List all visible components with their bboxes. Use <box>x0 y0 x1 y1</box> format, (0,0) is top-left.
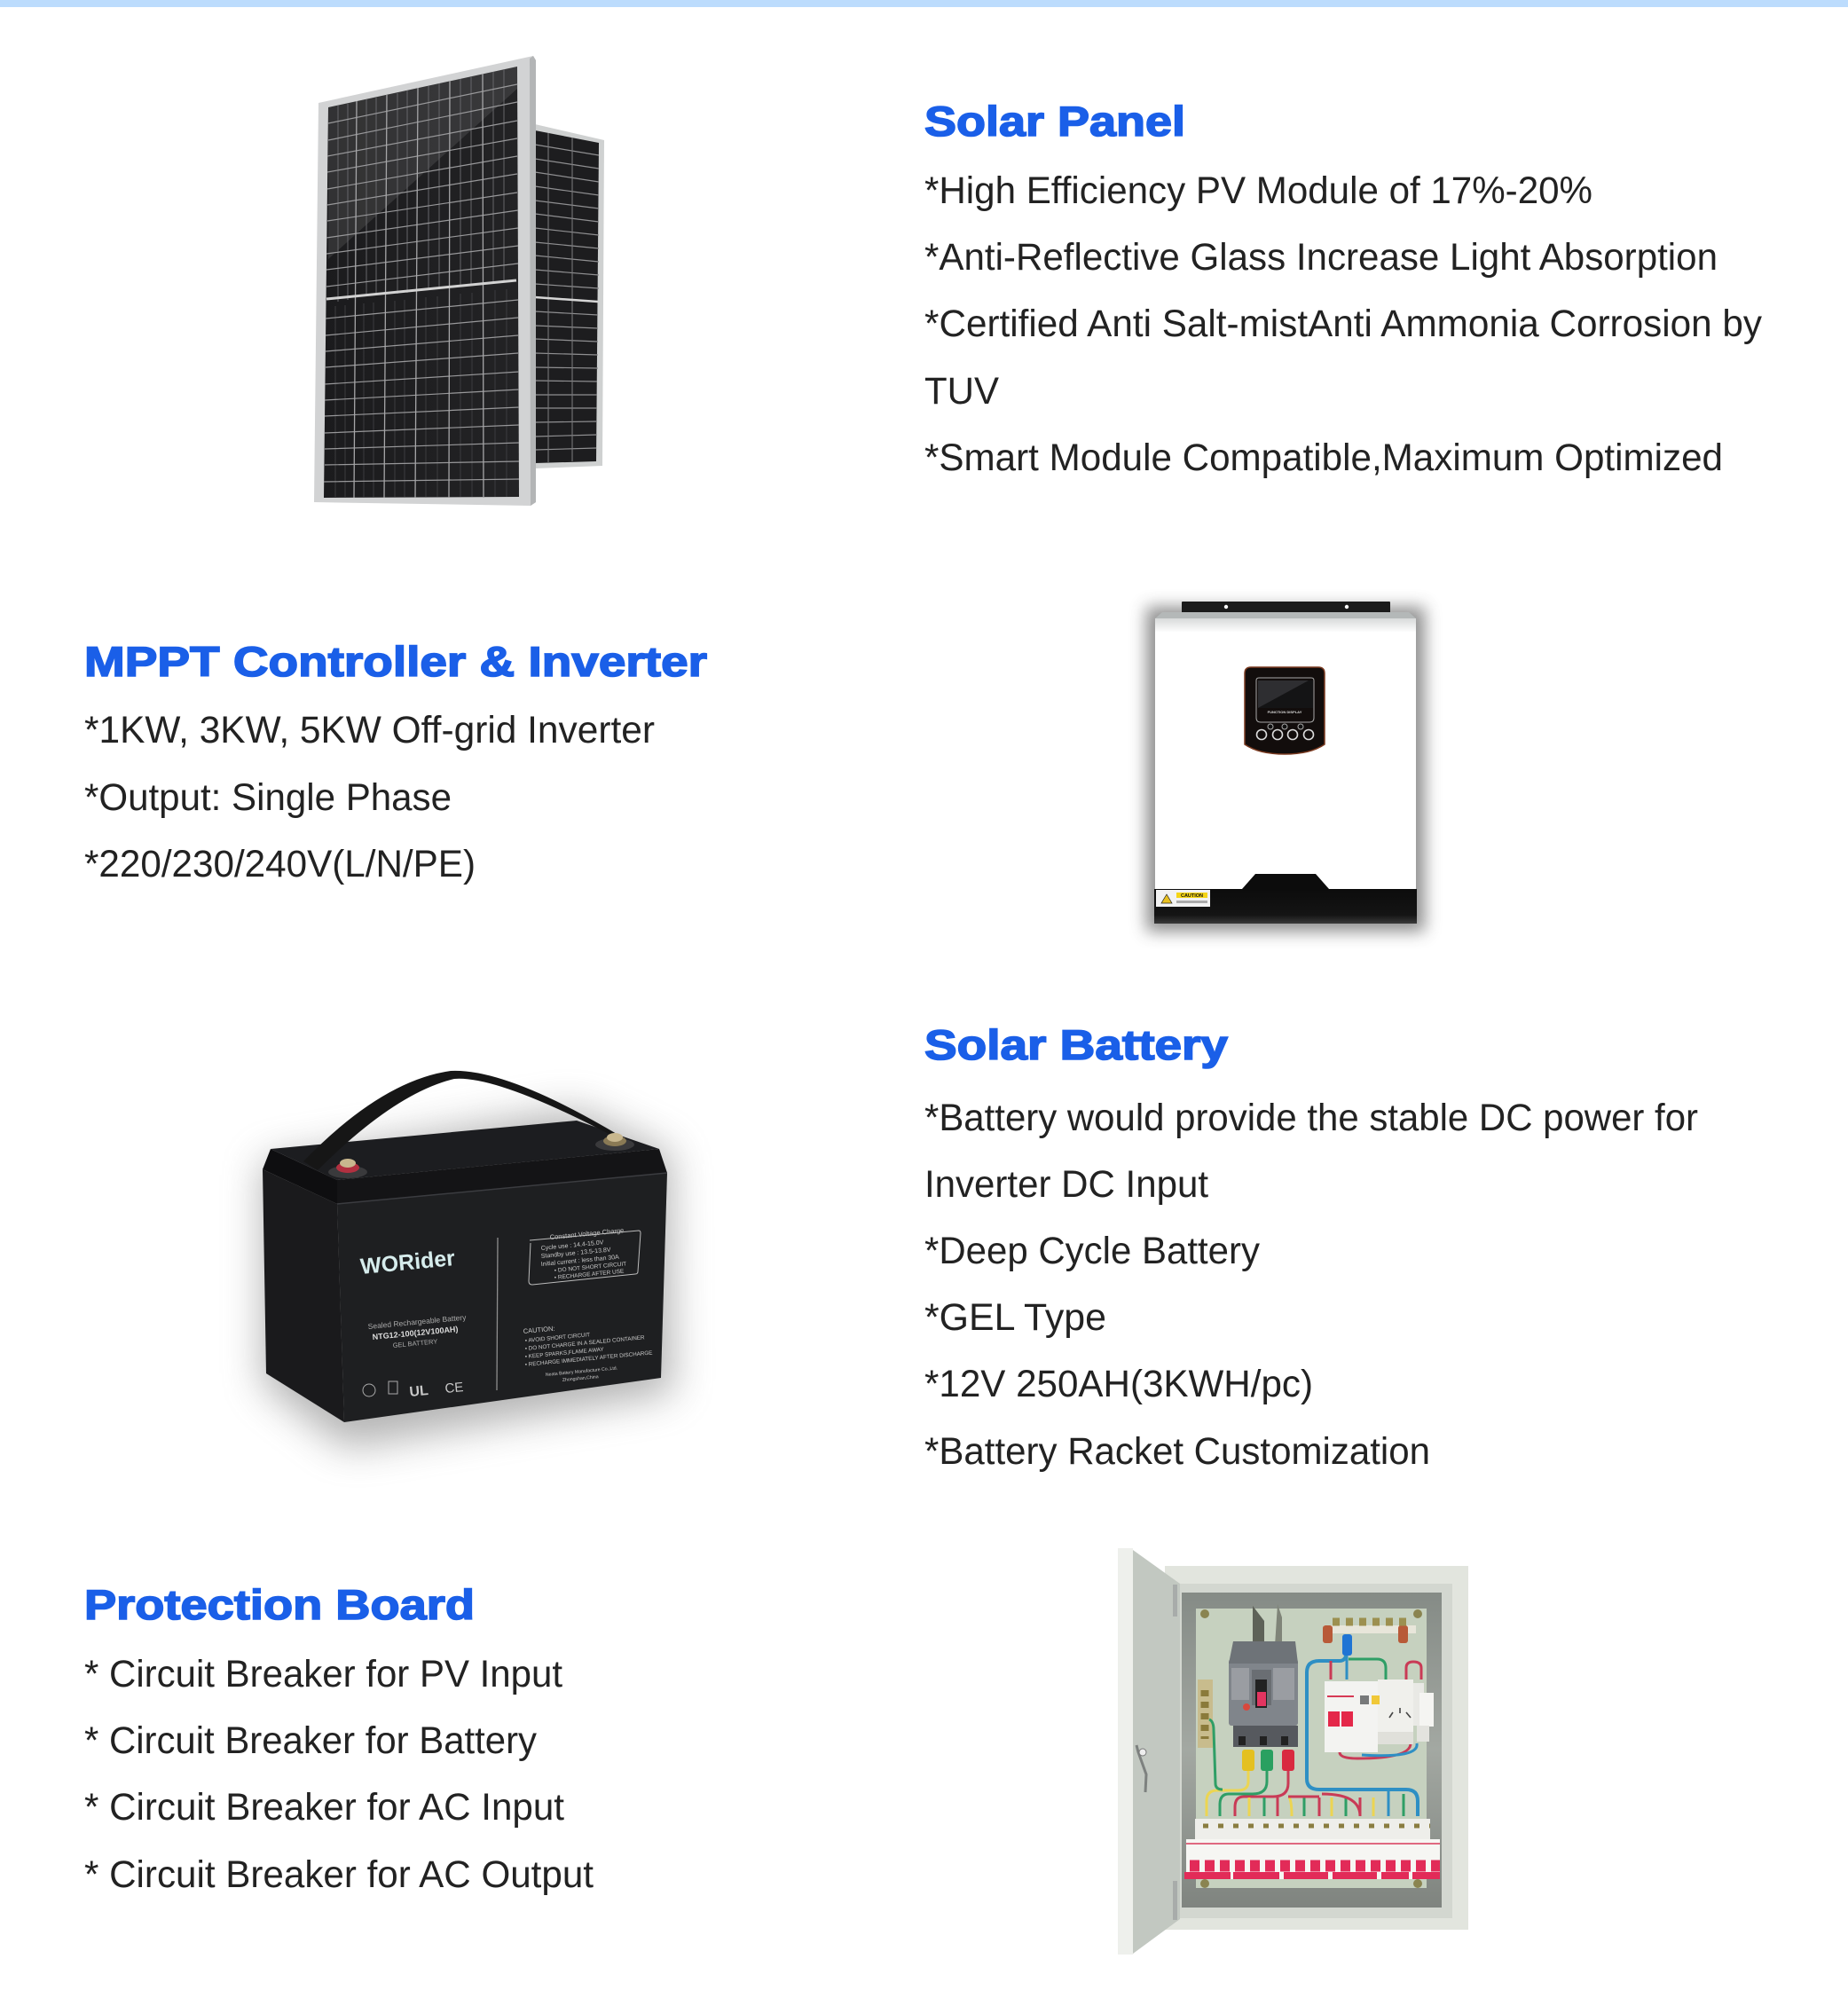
battery model text: Sealed Rechargeable Battery <box>367 1313 467 1331</box>
battery caution text <box>523 1325 653 1383</box>
feature list: *220/230/240V(L/N/PE) <box>84 843 476 885</box>
battery caution text: • AVOID SHORT CIRCUIT <box>525 1332 591 1344</box>
feature list: *Battery Racket Customization <box>924 1430 1430 1473</box>
feature list: *Deep Cycle Battery <box>924 1230 1260 1272</box>
feature list: *12V 250AH(3KWH/pc) <box>924 1363 1313 1405</box>
battery brand logo: WORider <box>359 1246 456 1279</box>
heading: MPPT Controller & Inverter: MPPT Controller & Inverter <box>84 638 707 685</box>
panel: battery image <box>263 1071 672 1448</box>
battery charge spec box: • DO NOT SHORT CIRCUIT <box>554 1261 627 1274</box>
feature list: *Certified Anti Salt-mistAnti Ammonia Corrosion by <box>924 303 1762 345</box>
feature list <box>924 169 1762 479</box>
feature list: *High Efficiency PV Module of 17%-20% <box>924 169 1592 212</box>
reflection <box>328 67 517 259</box>
battery caution text: CAUTION: <box>523 1325 555 1335</box>
feature list: *GEL Type <box>924 1296 1106 1339</box>
panel: MPPT description <box>84 638 707 885</box>
battery handle strap <box>303 1071 617 1170</box>
feature list: *Output: Single Phase <box>84 776 452 819</box>
battery caution text: • DO NOT CHARGE IN A SEALED CONTAINER <box>525 1334 645 1352</box>
top accent bar <box>0 0 1848 7</box>
main circuit breaker <box>1229 1604 1298 1747</box>
open enclosure door <box>1118 1548 1180 1955</box>
heading: Protection Board: Protection Board <box>84 1581 475 1628</box>
enclosure box <box>1165 1566 1468 1930</box>
battery caution text: Neata Battery Manufacture Co.,Ltd. <box>546 1365 617 1378</box>
battery charge spec box: Cycle use : 14.4-15.0V <box>541 1239 604 1252</box>
caution label: CAUTION <box>1181 893 1203 899</box>
battery certification marks: CE <box>444 1380 464 1396</box>
feature list: *Smart Module Compatible,Maximum Optimized <box>924 437 1723 479</box>
inverter shadow <box>1146 607 1425 932</box>
heading: Solar Battery: Solar Battery <box>924 1021 1228 1068</box>
caution label <box>1156 890 1210 907</box>
battery shadow <box>263 1109 672 1448</box>
battery charge spec box: Constant Voltage Charge <box>549 1226 625 1241</box>
inverter mounting bracket <box>1182 602 1390 614</box>
feature list <box>924 1097 1698 1473</box>
rear solar module <box>535 124 604 468</box>
battery caution text: Zhongshan,China <box>562 1374 599 1383</box>
inverter body <box>1154 618 1417 924</box>
heading: Solar Panel: Solar Panel <box>924 98 1185 145</box>
feature list: * Circuit Breaker for Battery <box>84 1719 537 1762</box>
battery certification marks <box>363 1380 464 1400</box>
feature list: * Circuit Breaker for PV Input <box>84 1653 562 1695</box>
panel: solar panel description <box>924 98 1762 479</box>
panel: inverter image <box>1146 602 1425 932</box>
panel: solar panel image <box>314 56 604 506</box>
battery caution text: • KEEP SPARKS,FLAME AWAY <box>525 1347 605 1360</box>
battery terminals <box>328 1133 634 1178</box>
inverter control panel <box>1245 667 1325 754</box>
feature list: TUV <box>924 370 999 413</box>
battery caution text: • RECHARGE IMMEDIATELY AFTER DISCHARGE <box>525 1349 653 1368</box>
battery certification marks: UL <box>409 1383 429 1400</box>
panel: protection board image <box>1118 1548 1468 1955</box>
feature list: *Anti-Reflective Glass Increase Light Absorption <box>924 236 1718 279</box>
feature list: *1KW, 3KW, 5KW Off-grid Inverter <box>84 709 655 751</box>
battery charge spec box: • RECHARGE AFTER USE <box>554 1269 625 1281</box>
wiring <box>1207 1634 1421 1816</box>
battery model text: NTG12-100(12V100AH) <box>372 1325 459 1341</box>
front solar module <box>314 56 536 506</box>
ground busbar <box>1323 1622 1416 1643</box>
battery case <box>263 1121 667 1422</box>
feature list <box>84 1653 594 1896</box>
panel: solar battery description <box>924 1021 1698 1473</box>
feature list: * Circuit Breaker for AC Input <box>84 1786 564 1829</box>
branch miniature circuit breakers <box>1184 1819 1440 1879</box>
neutral busbar <box>1198 1680 1213 1748</box>
battery charge spec box <box>529 1226 641 1285</box>
feature list: *Battery would provide the stable DC power for <box>924 1097 1698 1139</box>
inverter control panel: FUNCTION DISPLAY <box>1268 710 1302 714</box>
residual current device and socket <box>1325 1680 1434 1752</box>
battery charge spec box: Standby use : 13.5-13.8V <box>541 1247 611 1260</box>
battery model text: GEL BATTERY <box>392 1337 438 1349</box>
feature list: * Circuit Breaker for AC Output <box>84 1853 594 1896</box>
feature list <box>84 709 655 885</box>
battery charge spec box: Initial current : less than 30A <box>541 1255 619 1268</box>
panel: protection board description <box>84 1581 594 1896</box>
battery model text <box>367 1313 467 1349</box>
feature list: Inverter DC Input <box>924 1163 1208 1206</box>
